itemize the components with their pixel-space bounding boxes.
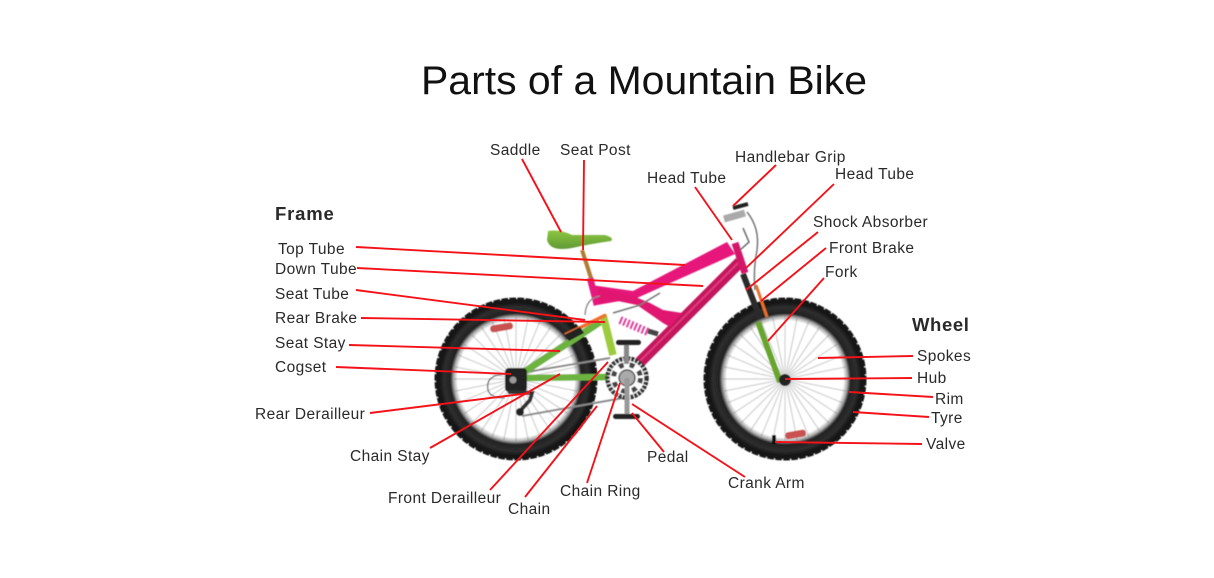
title: Parts of a Mountain Bike	[421, 59, 867, 103]
part labels: Chain Stay	[350, 448, 430, 465]
part labels: Tyre	[931, 410, 963, 427]
rear brake	[564, 315, 606, 341]
part labels: Head Tube	[835, 166, 914, 183]
part labels: Top Tube	[278, 241, 345, 258]
part labels: Front Derailleur	[388, 490, 501, 507]
part labels: Chain	[508, 501, 550, 518]
part labels: Spokes	[917, 348, 971, 365]
front hub	[779, 374, 791, 386]
part labels: Pedal	[647, 449, 689, 466]
fork	[743, 274, 780, 382]
part labels: Seat Post	[560, 142, 631, 159]
drivetrain	[608, 340, 646, 419]
part labels	[255, 142, 971, 518]
shock absorber	[620, 320, 658, 334]
part labels: Front Brake	[829, 240, 914, 257]
handlebar	[724, 204, 758, 290]
heading: Wheel: Wheel	[912, 314, 969, 335]
part labels: Saddle	[490, 142, 541, 159]
illustration: mountain bike	[436, 204, 865, 459]
heading: Frame: Frame	[275, 203, 335, 224]
part labels: Rear Brake	[275, 310, 357, 327]
part labels: Handlebar Grip	[735, 149, 846, 166]
part labels: Head Tube	[647, 170, 726, 187]
frame: main pink tubes	[585, 242, 745, 366]
part labels: Down Tube	[275, 261, 357, 278]
part labels: Seat Stay	[275, 335, 346, 352]
seat post	[582, 250, 591, 278]
saddle	[547, 230, 612, 249]
part labels: Rear Derailleur	[255, 406, 365, 423]
part labels: Seat Tube	[275, 286, 349, 303]
front wheel	[705, 299, 865, 459]
part labels: Chain Ring	[560, 483, 641, 500]
part labels: Cogset	[275, 359, 327, 376]
part labels: Fork	[825, 264, 858, 281]
part labels: Rim	[935, 391, 964, 408]
leader lines	[336, 159, 933, 497]
rear wheel	[436, 299, 596, 459]
part labels: Crank Arm	[728, 475, 805, 492]
part labels: Shock Absorber	[813, 214, 928, 231]
chain	[488, 358, 623, 416]
part labels: Valve	[926, 436, 966, 453]
frame: rear triangle	[520, 315, 613, 378]
cogset and rear derailleur	[505, 368, 532, 416]
part labels: Hub	[917, 370, 947, 387]
